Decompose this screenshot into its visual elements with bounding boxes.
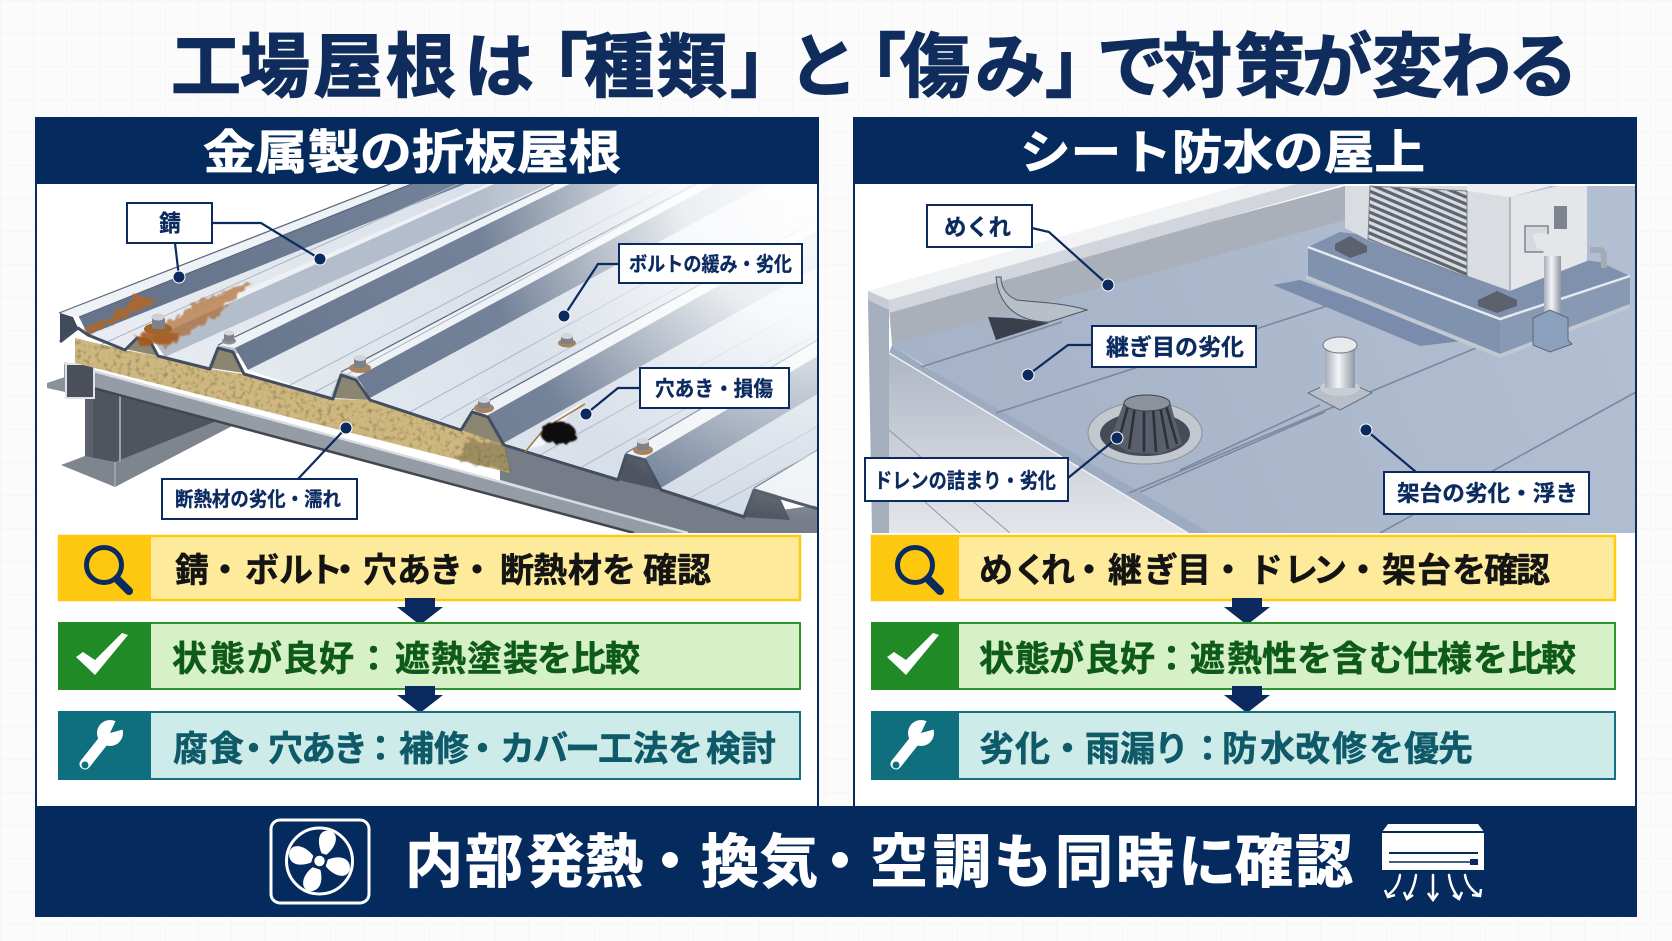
- arrow: step 2 to 3: [397, 686, 443, 713]
- panel: metal folded-plate roof: [35, 117, 819, 806]
- title: 工場屋根は「種類」と「傷み」で対策が変わる: [171, 28, 1578, 106]
- callout: seam deterioration: [1022, 326, 1256, 381]
- air conditioner unit on base: [1306, 184, 1630, 356]
- step: inspect metal roof: [58, 535, 800, 601]
- icon: magnifier: [86, 548, 129, 591]
- bolts: [144, 314, 653, 455]
- step: good condition sheet roof: 状態が良好：遮熱性を含む仕様を比較: [979, 640, 1576, 679]
- parapet wall: [868, 184, 1345, 533]
- vent pipe: [1308, 337, 1372, 410]
- illustration: folded-plate roof cross-section: [47, 184, 817, 533]
- callout: seam deterioration: 継ぎ目の劣化: [1106, 334, 1244, 360]
- callout: rust: 錆: [159, 210, 181, 236]
- callout: insulation deterioration: 断熱材の劣化・濡れ: [175, 488, 341, 511]
- arrow: step 1 to 2: [1224, 598, 1270, 625]
- step: good condition metal roof: [58, 622, 800, 690]
- callout: loose bolts: [558, 244, 802, 322]
- icon: air conditioner: [1382, 824, 1484, 900]
- callout: insulation deterioration: [162, 422, 357, 519]
- step: corrosion metal roof: [58, 711, 800, 780]
- panel heading: sheet roof: シート防水の屋上: [1020, 126, 1425, 179]
- roof seams and cracks: [921, 292, 1636, 533]
- icon: check mark: [76, 633, 128, 675]
- arrow: step 1 to 2: [397, 598, 443, 625]
- panel heading: metal roof: 金属製の折板屋根: [203, 126, 621, 179]
- roof drain: [1088, 395, 1202, 464]
- dark wet end of insulation: [455, 440, 512, 473]
- step: inspect sheet roof: [871, 535, 1615, 601]
- step: deterioration sheet roof: [871, 711, 1615, 780]
- arrow: step 2 to 3: [1224, 686, 1270, 713]
- panel frame: [854, 118, 1636, 808]
- callout: holes and damage: [580, 368, 789, 420]
- step: inspect metal roof: 錆・ボルト・穴あき・断熱材を確認: [175, 552, 711, 590]
- fade at the top right of the roof: [490, 184, 817, 511]
- icon: ventilation fan: [271, 820, 369, 903]
- step: inspect sheet roof: めくれ・継ぎ目・ドレン・架台を確認: [979, 552, 1550, 590]
- rib hollows over steel: [618, 455, 790, 520]
- callout: stand deterioration: [1360, 424, 1589, 514]
- panel: sheet waterproofing rooftop: [853, 117, 1637, 808]
- panel frame: [36, 118, 818, 808]
- icon: check mark: [887, 633, 939, 675]
- callout: stand deterioration: 架台の劣化・浮き: [1397, 481, 1578, 506]
- callout: drain clogging: [865, 432, 1123, 501]
- icon: wrench: [82, 716, 132, 768]
- callout: drain clogging: ドレンの詰まり・劣化: [874, 470, 1056, 493]
- icon: wrench: [892, 716, 943, 768]
- callout: holes and damage: 穴あき・損傷: [655, 378, 773, 401]
- illustration: sheet waterproof rooftop: [868, 184, 1636, 533]
- callout: loose bolts: ボルトの緩み・劣化: [629, 253, 792, 276]
- step: deterioration sheet roof: 劣化・雨漏り：防水改修を優先: [979, 730, 1473, 769]
- roof sheet facets: [58, 184, 817, 515]
- panel heading: metal roof: [35, 117, 819, 184]
- rust patches: [83, 282, 252, 350]
- footer banner: [35, 806, 1637, 917]
- step: corrosion metal roof: 腐食・穴あき：補修・カバー工法を検討: [173, 730, 776, 769]
- step: good condition metal roof: 状態が良好：遮熱塗装を比較: [172, 640, 640, 679]
- icon: magnifier: [898, 548, 940, 591]
- steel beam: [47, 362, 818, 533]
- step: good condition sheet roof: [871, 622, 1615, 690]
- roof surface: [892, 186, 1636, 533]
- callout: peeling: めくれ: [944, 214, 1011, 240]
- callout: rust: [127, 203, 326, 283]
- panel heading: sheet roof: [853, 117, 1637, 184]
- shadow of AC base: [1273, 280, 1470, 346]
- front edge of sheet: [60, 328, 818, 517]
- roof hole damage: [525, 402, 585, 452]
- insulation layer: [75, 338, 510, 473]
- callout: peeling: [927, 205, 1114, 291]
- footer message: 内部発熱・換気・空調も同時に確認: [405, 830, 1353, 895]
- lifted sheet flap: [988, 277, 1087, 340]
- rib hollows: [125, 338, 504, 445]
